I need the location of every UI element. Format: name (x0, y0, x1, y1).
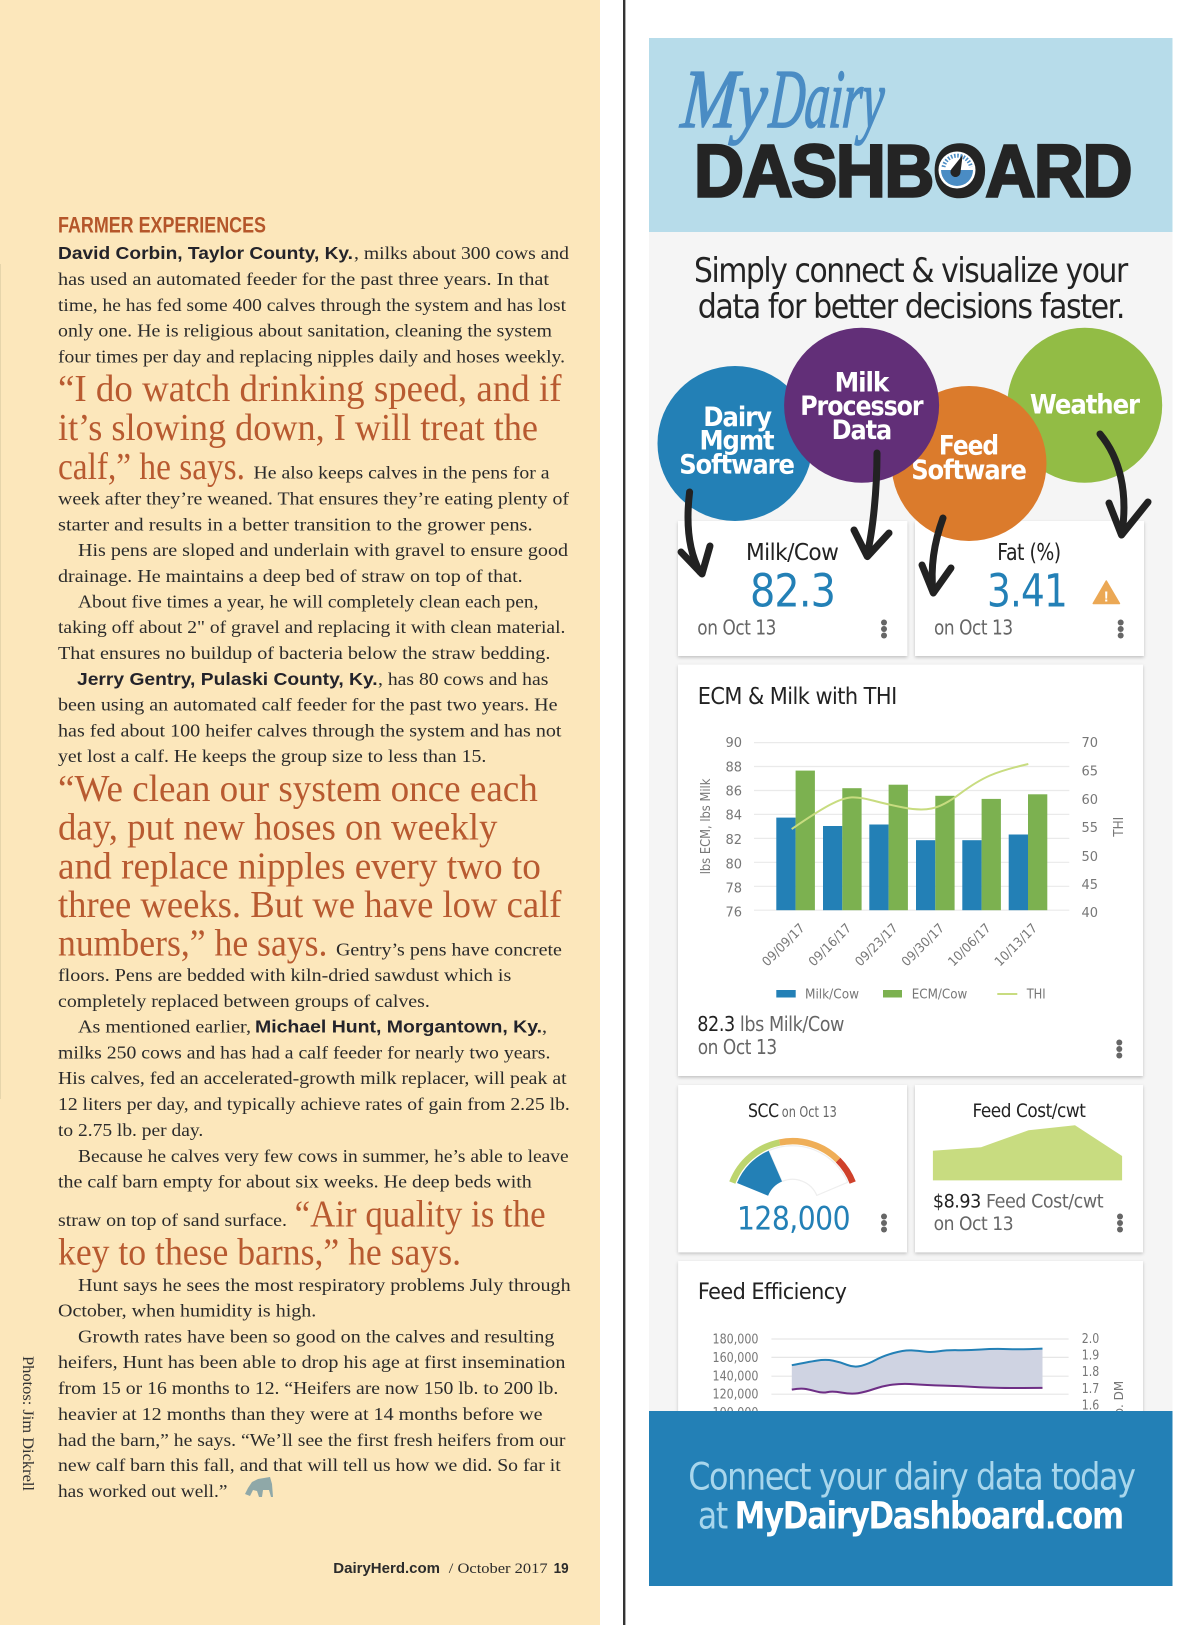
arrow: feed software to fat card (922, 518, 951, 593)
panel: my dairy dashboard ad (649, 38, 1172, 1586)
bar chart: milk, ecm and thi: 86 (725, 785, 742, 800)
text block: David Corbin paragraph: David Corbin, Taylor County, Ky. (58, 243, 353, 263)
text block: Michael Hunt paragraph: Michael Hunt, Morgantown, Ky. (255, 1016, 542, 1036)
pull quote: clean our system: and replace nipples every two to (58, 845, 541, 887)
card: milk per cow: Milk/Cow (746, 540, 838, 566)
text block: David Corbin paragraph (58, 243, 569, 366)
pull quote: clean our system: numbers,” he says. (58, 923, 327, 965)
text block: Michael Hunt paragraph: His calves, fed an accelerated-growth milk replacer, will peak at (58, 1068, 567, 1088)
bar chart: milk, ecm and thi: 09/23/17 (853, 921, 901, 970)
icon: gauge in wordmark (938, 152, 976, 188)
text block: pens paragraph: That ensures no buildup of bacteria below the straw bedding. (58, 643, 550, 663)
text block: Gentry pens paragraph: Gentry’s pens have concrete (336, 940, 562, 960)
area chart (933, 1125, 1122, 1180)
bar chart: milk, ecm and thi: 70 (1082, 736, 1098, 751)
text block: pens paragraph: drainage. He maintains a deep bed of straw on top of that. (58, 566, 523, 586)
pull quote: drinking speed: “I do watch drinking speed, and if (58, 368, 562, 410)
bar chart: milk, ecm and thi: 60 (1082, 793, 1098, 808)
footer: folio: / October 2017 (449, 1561, 548, 1577)
card: milk per cow: 82.3 (750, 564, 835, 617)
text block: pens paragraph (58, 463, 569, 663)
line chart: feed efficiency (712, 1332, 1126, 1421)
tagline: data for better decisions faster. (698, 287, 1124, 327)
banner: call to action: at (698, 1494, 728, 1537)
bar chart: milk, ecm and thi: 09/30/17 (899, 921, 948, 970)
pull quote: drinking speed (58, 368, 562, 488)
pull quote: air quality: key to these barns,” he says. (58, 1232, 461, 1274)
bar chart: milk, ecm and thi: 45 (1082, 878, 1098, 893)
text block: Hunt closing paragraphs: has worked out well.” (58, 1481, 227, 1501)
bar chart: milk, ecm and thi: 65 (1082, 765, 1098, 780)
text block: David Corbin paragraph: , milks about 300 cows and (354, 243, 569, 263)
circle: milk processor data: Milk (835, 367, 890, 398)
text block: Hunt closing paragraphs: October, when humidity is high. (58, 1301, 316, 1321)
line chart: feed efficiency: 120,000 (712, 1388, 758, 1403)
text block: Jerry Gentry paragraph (58, 669, 562, 766)
pull quote: air quality: “Air quality is the (295, 1193, 546, 1235)
line chart: feed efficiency: 1.7 (1082, 1382, 1099, 1397)
line chart: feed efficiency: 160,000 (712, 1351, 758, 1366)
card: feed efficiency: Feed Efficiency (698, 1279, 847, 1305)
card: ecm and milk chart (678, 665, 1143, 1076)
text block: Hunt closing paragraphs: from 15 or 16 months to 12. “Heifers are now 150 lb. to 200 lb. (58, 1378, 558, 1398)
circle: weather: Weather (1030, 389, 1141, 420)
text block: Hunt closing paragraphs: heifers, Hunt has been able to drop his age at first insemination (58, 1352, 565, 1372)
text block: Michael Hunt paragraph: the calf barn empty for about six weeks. He deep beds with (58, 1171, 532, 1191)
chart legend (776, 988, 1046, 1003)
text block: Jerry Gentry paragraph: Jerry Gentry, Pulaski County, Ky. (77, 669, 378, 689)
text block: Hunt closing paragraphs: Growth rates have been so good on the calves and resulting (78, 1327, 554, 1347)
bar chart: milk, ecm and thi: 90 (725, 736, 742, 751)
card: feed cost per cwt (915, 1085, 1143, 1252)
card: scc gauge (678, 1085, 907, 1252)
text block: Hunt closing paragraphs (58, 1275, 571, 1501)
icon: cow end mark (245, 1477, 273, 1497)
text block: Jerry Gentry paragraph: , has 80 cows and has (378, 669, 548, 689)
card: fat percent (915, 521, 1144, 656)
pull quote: clean our system: three weeks. But we have low calf (58, 884, 562, 926)
text block: Jerry Gentry paragraph: been using an automated calf feeder for the past two years. He (58, 695, 558, 715)
text block: pens paragraph: His pens are sloped and underlain with gravel to ensure good (78, 540, 568, 560)
arrow: weather to fat card (1100, 434, 1148, 535)
text block: Michael Hunt paragraph: 12 liters per day, and typically achieve rates of gain from 2.25 lb. (58, 1094, 570, 1114)
text block: David Corbin paragraph: has used an automated feeder for the past three years. In that (58, 269, 549, 289)
bar chart: milk, ecm and thi: 40 (1082, 906, 1098, 921)
banner: call to action (649, 1411, 1172, 1586)
card: feed cost per cwt: on Oct 13 (934, 1213, 1013, 1235)
footer: folio (333, 1560, 569, 1577)
pull quote: clean our system: “We clean our system once each (58, 768, 538, 810)
card: scc gauge: SCC (748, 1100, 779, 1122)
text block: Michael Hunt paragraph: to 2.75 lb. per day. (58, 1120, 203, 1140)
card: scc gauge: on Oct 13 (782, 1103, 837, 1121)
chart legend: THI (1026, 988, 1046, 1003)
bar chart: milk, ecm and thi: 78 (725, 882, 742, 897)
card: scc gauge: 128,000 (737, 1199, 850, 1237)
line chart: feed efficiency: 2.0 (1082, 1332, 1099, 1347)
bar chart: milk, ecm and thi: 80 (725, 857, 742, 872)
circle: feed software (892, 386, 1046, 541)
text block: pens paragraph: He also keeps calves in the pens for a (254, 463, 550, 483)
text block: David Corbin paragraph: time, he has fed some 400 calves through the system and has lost (58, 295, 566, 315)
logo: dashboard wordmark: DASHBOARD (694, 129, 1131, 212)
arrow: processor data to milk card (854, 453, 889, 557)
circle: milk processor data: Processor (800, 391, 924, 422)
card: ecm and milk chart: ECM & Milk with THI (698, 684, 897, 710)
card: ecm and milk chart: 82.3 lbs Milk/Cow (697, 1012, 844, 1036)
bar chart: milk, ecm and thi: 82 (725, 833, 742, 848)
logo: my dairy script: My (678, 52, 771, 145)
text block: Gentry pens paragraph: floors. Pens are bedded with kiln-dried sawdust which is (58, 965, 511, 985)
bar chart: milk, ecm and thi: lbs ECM, lbs Milk (699, 778, 714, 874)
bar chart: milk, ecm and thi: 55 (1082, 821, 1098, 836)
text block: Hunt closing paragraphs: new calf barn this fall, and that will tell us how we did. So far it (58, 1455, 561, 1475)
line chart: feed efficiency: 1.6 (1082, 1399, 1099, 1414)
bar chart: milk, ecm and thi: 84 (725, 809, 742, 824)
circle: weather (1007, 328, 1162, 483)
text block: Michael Hunt paragraph: As mentioned earlier, (78, 1016, 251, 1036)
pull quote: drinking speed: it’s slowing down, I will treat the (58, 407, 538, 449)
pull quote: drinking speed: calf,” he says. (58, 446, 245, 488)
tagline: Simply connect & visualize your (694, 251, 1128, 291)
text block: David Corbin paragraph: four times per day and replacing nipples daily and hoses weekly. (58, 346, 565, 366)
icon: warning triangle: ! (1104, 588, 1109, 606)
circle: dairy mgmt software: Software (679, 450, 794, 481)
circle: feed software: Software (911, 455, 1026, 486)
line chart: feed efficiency: lb. DM (1112, 1381, 1126, 1419)
text block: Jerry Gentry paragraph: yet lost a calf. He keeps the group size to less than 15. (58, 746, 486, 766)
card: feed cost per cwt: $8.93 Feed Cost/cwt (933, 1190, 1103, 1212)
card: milk per cow (678, 521, 907, 656)
banner: call to action: Connect your dairy data today (688, 1456, 1135, 1498)
chart legend: Milk/Cow (805, 988, 859, 1003)
bar chart: milk, ecm and thi: 50 (1082, 850, 1098, 865)
bar chart: milk, ecm and thi: 10/06/17 (946, 921, 994, 970)
card: feed efficiency (678, 1261, 1143, 1431)
circle: milk processor data (784, 328, 939, 483)
text block: pens paragraph: week after they’re weaned. That ensures they’re eating plenty of (58, 488, 569, 508)
icon: warning triangle (1093, 581, 1120, 606)
pull quote: air quality (58, 1193, 546, 1274)
text block: pens paragraph: taking off about 2" of gravel and replacing it with clean material. (58, 617, 565, 637)
logo: my dairy script: Dairy (766, 52, 888, 145)
text block: Michael Hunt paragraph (58, 1016, 570, 1230)
arrow: dairy software to milk card (681, 492, 710, 574)
photo credit: Photos: Jim Dickrell (19, 1356, 36, 1492)
text block: Michael Hunt paragraph: milks 250 cows and has had a calf feeder for nearly two years. (58, 1042, 550, 1062)
card: fat percent: 3.41 (987, 564, 1067, 617)
gauge chart (732, 1141, 853, 1196)
bar chart: milk, ecm and thi: 09/09/17 (760, 921, 808, 970)
panel: cream article column (0, 0, 600, 1625)
circle: dairy mgmt software (658, 366, 812, 521)
text block: Gentry pens paragraph: completely replaced between groups of calves. (58, 991, 430, 1011)
footer: folio: 19 (554, 1560, 569, 1577)
line chart: feed efficiency: 140,000 (712, 1370, 758, 1385)
banner: call to action: MyDairyDashboard.com (735, 1494, 1123, 1537)
text block: David Corbin paragraph: only one. He is religious about sanitation, cleaning the system (58, 321, 552, 341)
text block: Jerry Gentry paragraph: has fed about 100 heifer calves through the system and has not (58, 720, 562, 740)
circle: feed software: Feed (939, 431, 998, 462)
line chart: feed efficiency: 1.9 (1082, 1348, 1099, 1364)
pull quote: clean our system (58, 768, 562, 965)
circle: dairy mgmt software: Mgmt (700, 426, 775, 457)
bar chart: milk, ecm and thi: THI (1112, 817, 1127, 838)
pull quote: clean our system: day, put new hoses on weekly (58, 807, 497, 849)
card: feed cost per cwt: Feed Cost/cwt (972, 1100, 1085, 1122)
logo: my dairy script (678, 52, 888, 145)
text block: pens paragraph: starter and results in a better transition to the grower pens. (58, 514, 533, 534)
footer: folio: DairyHerd.com (333, 1560, 440, 1577)
text block: Hunt closing paragraphs: heavier at 12 months than they were at 14 months before we (58, 1404, 542, 1424)
bar chart: milk, ecm and thi: 10/13/17 (992, 921, 1041, 970)
heading: farmer experiences: FARMER EXPERIENCES (58, 212, 266, 237)
text block: Michael Hunt paragraph: straw on top of sand surface. (58, 1210, 287, 1230)
bar chart: milk, ecm and thi (699, 736, 1127, 1003)
data source circles (658, 328, 1162, 541)
line chart: feed efficiency: 1.8 (1082, 1365, 1099, 1380)
card: milk per cow: on Oct 13 (697, 616, 776, 640)
text block: Gentry pens paragraph (58, 940, 562, 1011)
bar chart: milk, ecm and thi: 09/16/17 (806, 921, 855, 970)
card: fat percent: on Oct 13 (934, 616, 1013, 640)
chart legend: ECM/Cow (912, 988, 968, 1003)
header: logo band (649, 38, 1172, 232)
text block: pens paragraph: About five times a year, he will completely clean each pen, (78, 591, 538, 611)
text block: Hunt closing paragraphs: Hunt says he sees the most respiratory problems July through (78, 1275, 571, 1295)
line chart: feed efficiency: 180,000 (712, 1332, 758, 1348)
circle: milk processor data: Data (832, 415, 891, 446)
text block: Hunt closing paragraphs: had the barn,” he says. “We’ll see the first fresh heifers from our (58, 1430, 565, 1450)
bar chart: milk, ecm and thi: 76 (725, 906, 742, 921)
circle: dairy mgmt software: Dairy (703, 402, 772, 433)
card: fat percent: Fat (%) (997, 540, 1061, 566)
tagline (694, 251, 1128, 327)
text block: Michael Hunt paragraph: Because he calves very few cows in summer, he’s able to leave (78, 1146, 569, 1166)
bar chart: milk, ecm and thi: 88 (725, 760, 742, 775)
text block: Michael Hunt paragraph: , (542, 1016, 547, 1036)
line chart: feed efficiency: 100,000 (712, 1406, 758, 1421)
card: ecm and milk chart: on Oct 13 (698, 1035, 777, 1059)
